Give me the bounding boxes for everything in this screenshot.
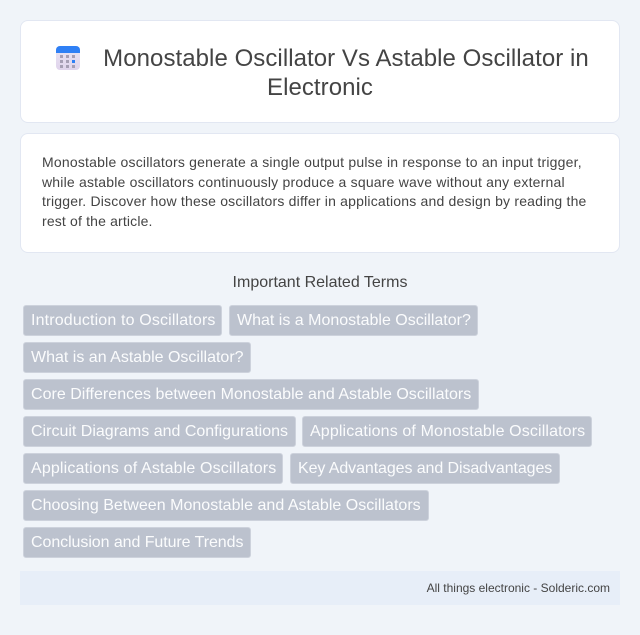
tag — [290, 453, 560, 484]
tag — [23, 379, 479, 410]
tag — [23, 453, 283, 484]
description text: Monostable oscillators generate a single output pulse in response to an input trigger, — [42, 154, 582, 170]
tag — [23, 305, 222, 336]
heading: related terms: Important Related Terms — [233, 274, 407, 291]
tag: Conclusion and Future Trends — [31, 534, 243, 551]
icon: calendar — [56, 46, 80, 70]
tag — [229, 305, 478, 336]
footer text: All things electronic - Solderic.com — [427, 581, 610, 595]
title: Electronic — [267, 74, 373, 101]
tag: Choosing Between Monostable and Astable Oscillators — [31, 497, 421, 514]
tag — [23, 342, 251, 373]
tag: Key Advantages and Disadvantages — [298, 460, 552, 477]
tag: What is an Astable Oscillator? — [31, 349, 244, 366]
footer bar — [20, 571, 620, 605]
tag — [302, 416, 592, 447]
tag — [23, 490, 429, 521]
title: Monostable Oscillator Vs Astable Oscillator in — [103, 45, 589, 72]
description text — [42, 154, 587, 228]
description text: rest of the article. — [42, 212, 153, 228]
tag: Applications of Astable Oscillators — [31, 460, 276, 477]
tag: What is a Monostable Oscillator? — [237, 312, 471, 329]
tag: Applications of Monostable Oscillators — [310, 423, 585, 440]
tag — [23, 416, 296, 447]
title — [103, 45, 589, 101]
description text: while astable oscillators continuously produce a square wave without any external — [42, 174, 565, 190]
description card — [20, 133, 620, 253]
header card — [20, 20, 620, 123]
tag list — [23, 305, 592, 558]
tag: Introduction to Oscillators — [31, 312, 216, 329]
tag: Core Differences between Monostable and Astable Oscillators — [31, 386, 471, 403]
tag: Circuit Diagrams and Configurations — [31, 423, 288, 440]
tag — [23, 527, 251, 558]
description text: trigger. Discover how these oscillators differ in applications and design by reading the — [42, 193, 587, 209]
